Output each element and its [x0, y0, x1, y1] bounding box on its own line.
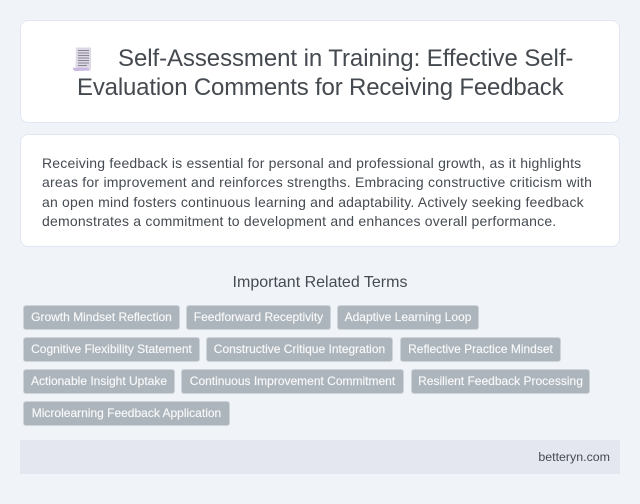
tag: Microlearning Feedback Application: [32, 406, 221, 420]
panel: description: [20, 134, 620, 247]
tag: Cognitive Flexibility Statement: [31, 342, 192, 356]
footer: [20, 440, 620, 474]
tag: Adaptive Learning Loop: [345, 310, 471, 324]
tag: [206, 337, 393, 362]
tag: [23, 337, 200, 362]
tag: [181, 369, 404, 394]
tag: Continuous Improvement Commitment: [190, 374, 395, 388]
tag: Reflective Practice Mindset: [408, 342, 553, 356]
text block: description: an open mind fosters continuous learning and adaptability. Actively seeking feedback: [42, 194, 584, 210]
text block: description: areas for improvement and reinforces strengths. Embracing constructive criticism with: [42, 174, 592, 190]
tag: Feedforward Receptivity: [194, 310, 323, 324]
text block: description: demonstrates a commitment to development and enhances overall performance.: [42, 213, 556, 229]
tag: [186, 305, 331, 330]
footer text: betteryn.com: [538, 450, 610, 464]
tag: [411, 369, 590, 394]
heading: related terms: Important Related Terms: [233, 274, 407, 291]
tag: Resilient Feedback Processing: [418, 374, 583, 388]
text block: description: Receiving feedback is essential for personal and professional growth, as it highlights: [42, 155, 581, 171]
tag: [337, 305, 479, 330]
title: Evaluation Comments for Receiving Feedback: [77, 74, 563, 101]
title: [77, 45, 573, 101]
tag: [23, 401, 230, 426]
tag: Actionable Insight Uptake: [31, 374, 167, 388]
tag: Growth Mindset Reflection: [31, 310, 172, 324]
icon: paper scroll: [73, 48, 91, 71]
tag list: [23, 305, 590, 426]
text block: description: [42, 155, 592, 229]
tag: Constructive Critique Integration: [214, 342, 385, 356]
panel: header: [20, 20, 620, 123]
tag: [23, 369, 175, 394]
tag: [400, 337, 561, 362]
tag: [23, 305, 180, 330]
title: Self-Assessment in Training: Effective Self-: [118, 45, 573, 72]
